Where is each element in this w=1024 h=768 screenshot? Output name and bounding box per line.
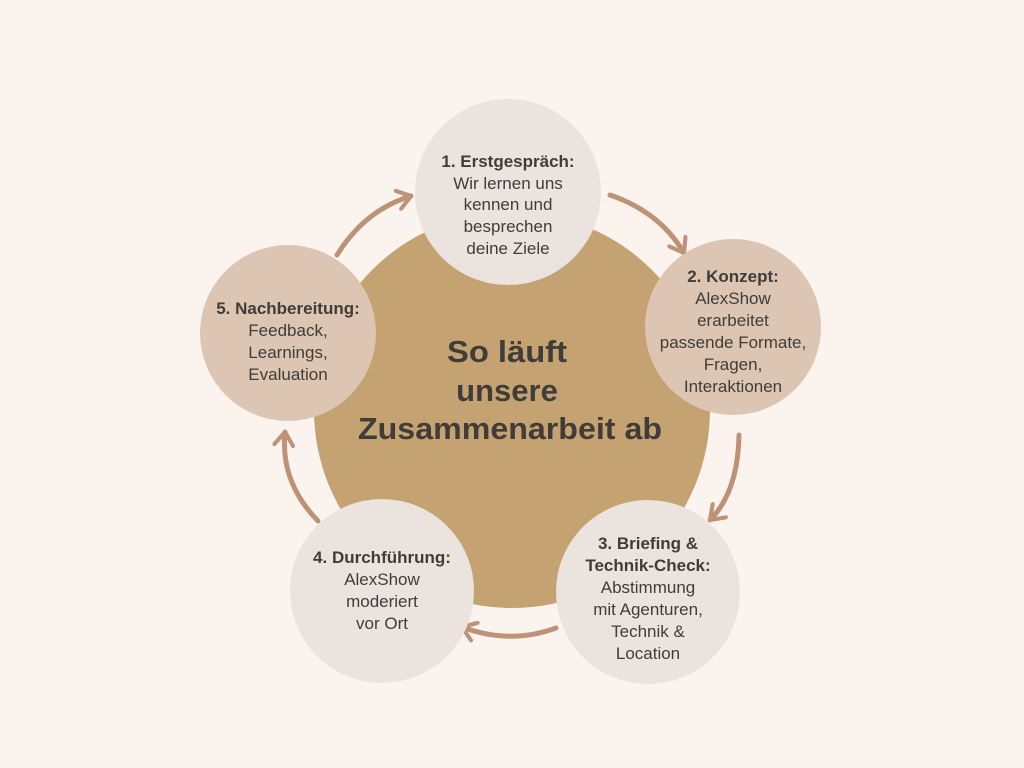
- step 5 circle: Feedback,: [248, 321, 328, 340]
- arrow: 3 to 4: [462, 627, 556, 636]
- step 3 circle: mit Agenturen,: [593, 600, 703, 619]
- title: unsere: [456, 373, 558, 408]
- step 1 circle: kennen und: [464, 195, 552, 214]
- step 3 circle: Abstimmung: [601, 578, 695, 597]
- step 3 circle: [556, 500, 740, 684]
- step 5 circle: [200, 245, 376, 421]
- step 1 circle: [415, 99, 601, 285]
- arrow: 4 to 5: [284, 432, 318, 521]
- step 5 circle: 5. Nachbereitung:: [216, 299, 360, 318]
- step 3 circle: Technik &: [611, 622, 686, 641]
- step 1 circle: besprechen: [464, 217, 552, 236]
- arrow: 1 to 2: [610, 195, 684, 253]
- step 1 circle: 1. Erstgespräch:: [441, 152, 575, 171]
- step 2 circle: passende Formate,: [660, 333, 806, 352]
- title: So läuft: [447, 334, 567, 369]
- arrow: 5 to 1: [337, 196, 411, 255]
- title: [358, 334, 662, 446]
- step 4 circle: moderiert: [346, 592, 418, 611]
- step 2 circle: Fragen,: [704, 355, 762, 374]
- step 5 circle: Learnings,: [248, 343, 328, 362]
- step 2 circle: AlexShow: [695, 289, 772, 308]
- step 2 circle: 2. Konzept:: [687, 267, 779, 286]
- step 1 circle: deine Ziele: [466, 239, 550, 258]
- step 4 circle: vor Ort: [356, 614, 408, 633]
- step 5 circle: Evaluation: [248, 365, 328, 384]
- step 2 circle: [645, 239, 821, 415]
- step 3 circle: Technik-Check:: [585, 556, 711, 575]
- step 4 circle: 4. Durchführung:: [313, 548, 451, 567]
- arrow: 2 to 3: [710, 435, 739, 520]
- step 1 circle: Wir lernen uns: [453, 174, 563, 193]
- step 3 circle: Location: [616, 644, 680, 663]
- title: Zusammenarbeit ab: [358, 411, 662, 446]
- step 4 circle: [290, 499, 474, 683]
- step 4 circle: AlexShow: [344, 570, 421, 589]
- step 2 circle: erarbeitet: [697, 311, 769, 330]
- step 3 circle: 3. Briefing &: [598, 534, 698, 553]
- center circle: [314, 212, 710, 608]
- step 2 circle: Interaktionen: [684, 377, 782, 396]
